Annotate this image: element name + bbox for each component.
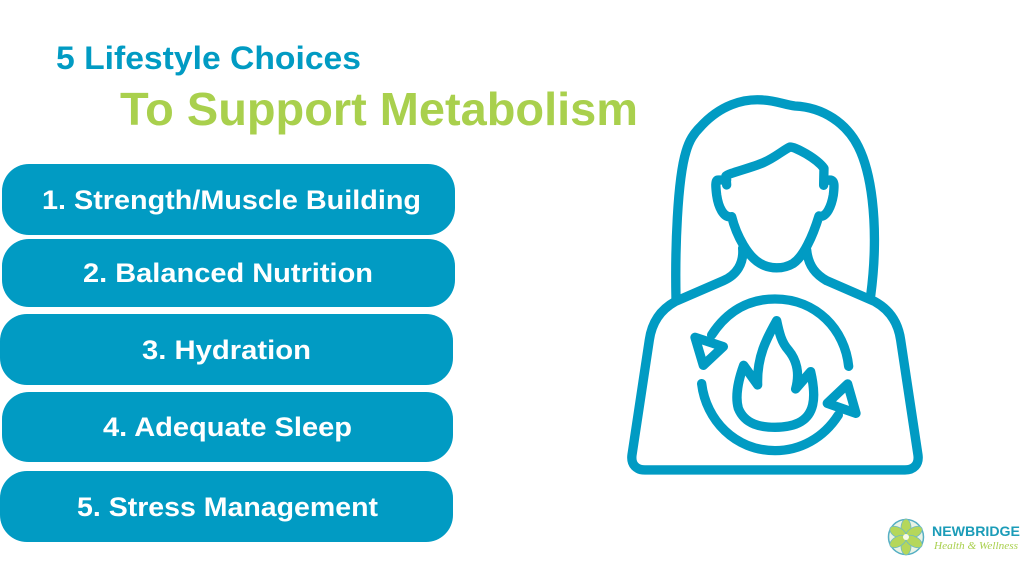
item 5: stress: 5. Stress Management	[77, 492, 378, 522]
title line 1: 5 Lifestyle Choices	[56, 40, 361, 76]
title line 2: To Support Metabolism	[120, 83, 638, 135]
logo wordmark: NEWBRIDGE	[932, 523, 1020, 539]
item 1: strength: 1. Strength/Muscle Building	[42, 185, 421, 215]
neck and shoulders	[632, 248, 918, 470]
icon: woman with metabolism flame	[632, 100, 918, 470]
arrowhead right	[827, 384, 856, 413]
item 4: sleep	[2, 392, 453, 462]
arrowhead left	[695, 337, 723, 365]
logo tagline: Health & Wellness	[933, 540, 1018, 552]
circular arrow bottom	[702, 384, 838, 451]
logo	[888, 519, 1020, 555]
hair outline	[676, 100, 874, 298]
circular arrow top	[712, 299, 849, 366]
item 5: stress	[0, 471, 453, 542]
item 4: sleep: 4. Adequate Sleep	[103, 412, 352, 442]
face outline	[716, 147, 834, 268]
logo mandala	[888, 519, 924, 555]
flame	[737, 321, 814, 427]
item 1: strength	[2, 164, 455, 235]
item 3: hydration: 3. Hydration	[142, 335, 311, 365]
item 2: nutrition: 2. Balanced Nutrition	[83, 258, 373, 288]
item 2: nutrition	[2, 239, 455, 307]
item 3: hydration	[0, 314, 453, 385]
